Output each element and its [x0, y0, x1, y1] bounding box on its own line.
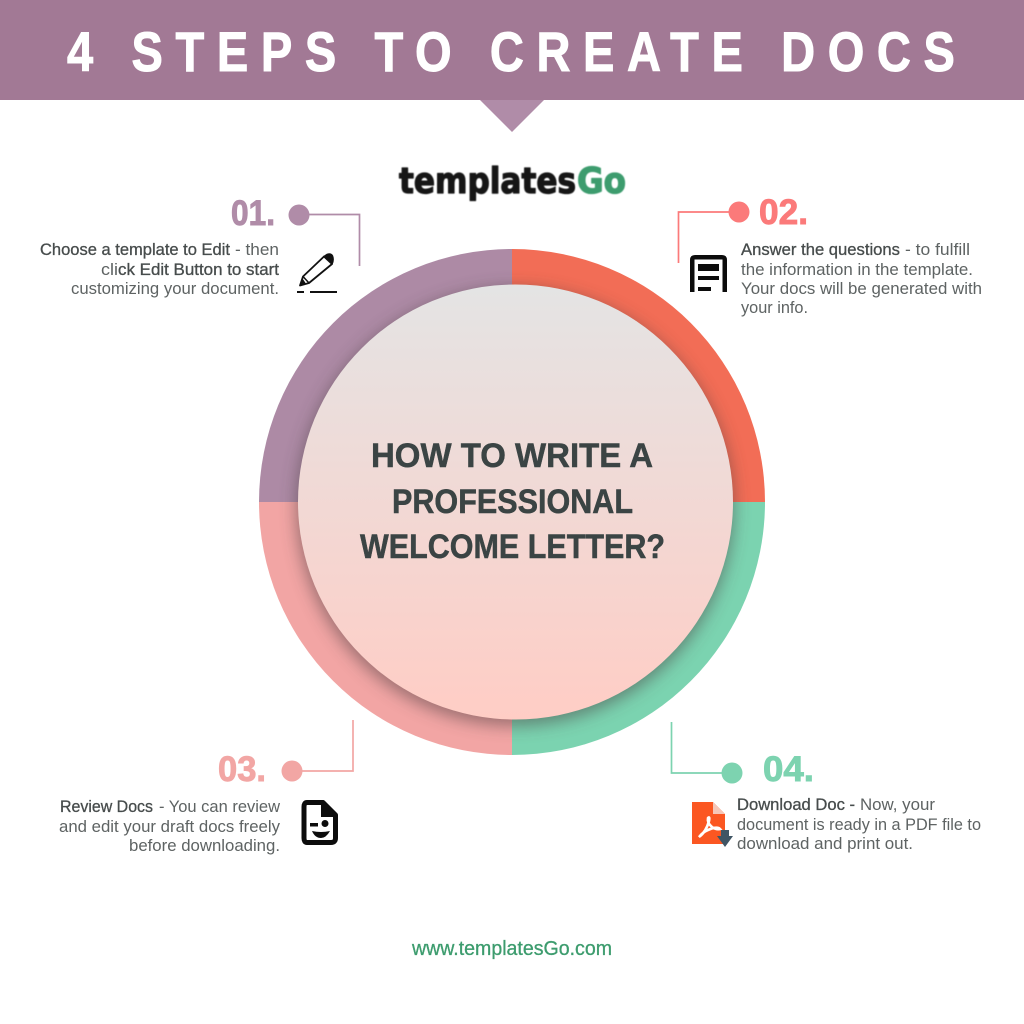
number 01: 01. [231, 194, 275, 233]
text 4: Download Doc - [737, 796, 855, 814]
banner pointer [480, 100, 544, 132]
text 2 [741, 241, 982, 317]
number 04: 04. [763, 750, 814, 789]
connector 2 [678, 202, 750, 263]
text 1: - then [235, 241, 279, 259]
step 3 [59, 720, 353, 855]
text 2: Answer the questions [741, 241, 900, 259]
text 2: Your docs will be generated with [741, 280, 982, 298]
ring segment: step 3 [259, 502, 512, 755]
text 3: - You can review [159, 798, 280, 816]
center question: PROFESSIONAL [392, 483, 633, 521]
connector 4 [672, 722, 742, 784]
footer url: www.templatesGo.com [411, 938, 612, 960]
inner circle [298, 284, 733, 720]
text 3: and edit your draft docs freely [59, 818, 281, 836]
title: 4 STEPS TO CREATE DOCS [67, 20, 955, 83]
step 1 [40, 194, 360, 298]
step 2 [678, 193, 982, 317]
icon: pencil [297, 254, 337, 292]
number 02: 02. [759, 193, 808, 232]
connector 3 [282, 720, 353, 782]
logo: templates [399, 161, 576, 202]
center question: HOW TO WRITE A [371, 437, 653, 475]
inner circle shadow [296, 288, 734, 726]
center question: WELCOME LETTER? [360, 528, 665, 566]
ring segment: step 1 [259, 249, 512, 502]
icon: form document [690, 255, 727, 292]
text 3: before downloading. [129, 837, 280, 855]
text 2: the information in the template. [741, 261, 973, 279]
icon: smiling document [304, 801, 337, 842]
icon: PDF download [692, 802, 733, 847]
text 2: - to fulfill [905, 241, 970, 259]
text 1: ck Edit Button to start [118, 261, 279, 279]
text 4: Now, your [860, 796, 936, 814]
connector 1 [288, 204, 360, 266]
text 3: Review Docs [60, 798, 153, 816]
text 2: your info. [741, 299, 808, 317]
ring segment: step 4 [512, 502, 765, 755]
step 4 [672, 722, 981, 853]
text 1: cli [101, 261, 118, 279]
text 4 [737, 796, 981, 853]
number 03: 03. [218, 750, 266, 789]
circular diagram [259, 249, 765, 755]
text 4: download and print out. [737, 835, 913, 853]
text 3 [59, 798, 281, 855]
text 4: document is ready in a PDF file to [737, 816, 981, 834]
ring segment: step 2 [512, 249, 765, 502]
text 1: Choose a template to Edit [40, 241, 230, 259]
text 1 [40, 241, 279, 298]
center question [360, 437, 665, 566]
logo: Go [577, 161, 626, 202]
header banner [0, 0, 1024, 132]
text 1: customizing your document. [71, 280, 279, 298]
